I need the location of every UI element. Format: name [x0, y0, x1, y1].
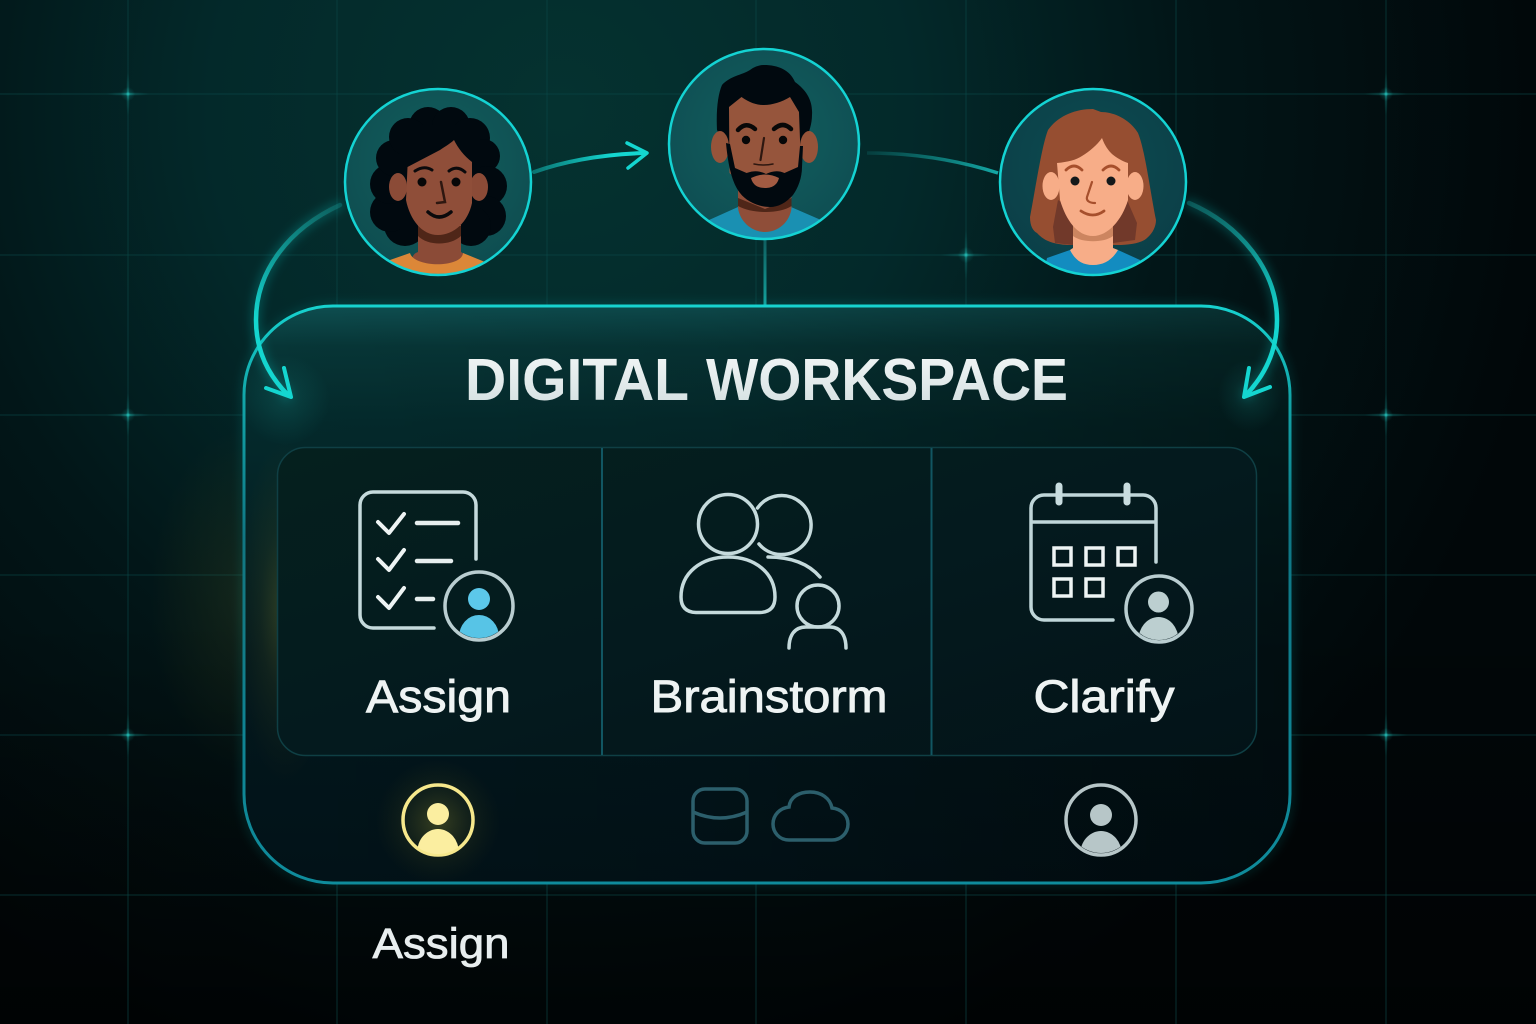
icon: brainstorm people	[681, 494, 846, 648]
label: bottom assign: Assign	[372, 920, 510, 968]
heading: digital workspace: WORKSPACE	[706, 347, 1068, 413]
arrow: first avatar to panel	[256, 205, 340, 397]
avatar: woman with curly hair	[345, 89, 531, 290]
panel: tool row	[278, 448, 1256, 756]
arrow: first to second avatar	[534, 143, 647, 172]
icon: calendar with user	[1031, 486, 1192, 663]
label: clarify: Clarify	[1034, 671, 1175, 722]
icon: user	[1064, 783, 1138, 857]
icon: checklist with user	[360, 492, 513, 659]
icon: cloud	[773, 792, 848, 840]
avatar: woman with auburn hair	[1000, 89, 1186, 290]
icon: highlighted user	[394, 778, 482, 866]
connector: middle avatar to panel	[764, 240, 766, 305]
label: assign: Assign	[366, 671, 511, 722]
heading: digital workspace: DIGITAL	[465, 347, 688, 413]
avatar: man with beard	[669, 49, 859, 250]
label: brainstorm: Brainstorm	[650, 671, 888, 722]
icon: database	[693, 789, 747, 843]
panel: digital workspace	[235, 306, 1290, 884]
arrow: third avatar to panel	[1189, 203, 1277, 397]
arrow: second to third avatar	[867, 153, 998, 173]
